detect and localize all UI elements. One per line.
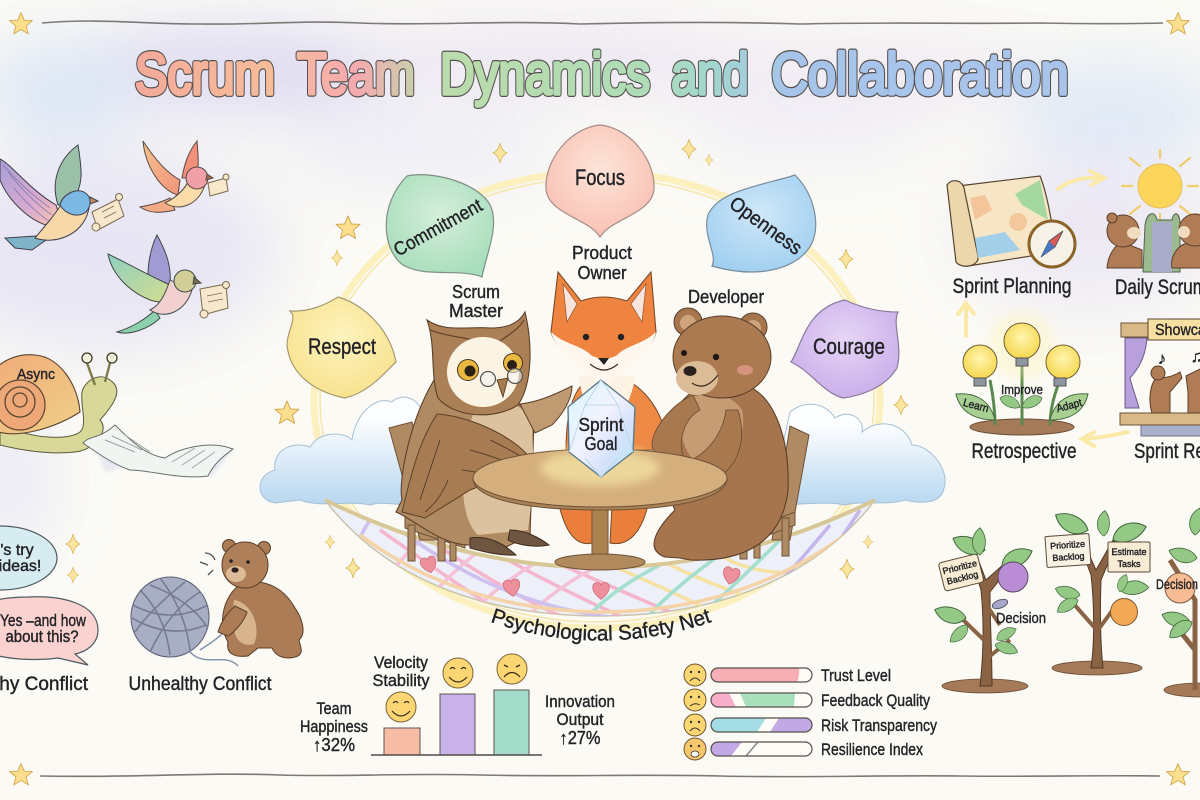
petal: Openness: Openness <box>725 193 806 260</box>
petal: Focus: Focus <box>575 165 625 190</box>
sprint goal gem: Sprint <box>578 415 624 435</box>
meter: risk transparency: Risk Transparency <box>821 717 938 735</box>
label: innovation output: ↑27% <box>560 728 600 748</box>
snail: Async <box>0 353 233 477</box>
title: Dynamics <box>440 42 650 107</box>
meter: trust level: Trust Level <box>821 667 891 685</box>
healthy conflict speech bubbles: Yes –and how <box>0 612 86 630</box>
label: innovation output <box>545 692 615 748</box>
title: Scrum <box>135 42 275 107</box>
sprint review stage <box>1120 319 1200 436</box>
title: Scrum <box>135 42 275 107</box>
label: team happiness <box>300 699 368 755</box>
sprint planning label: Sprint Planning <box>952 275 1072 298</box>
role labels: Product <box>572 243 632 263</box>
left cloud <box>260 397 430 505</box>
retrospective label: Retrospective <box>972 440 1076 463</box>
safety net label: Psychological Safety Net <box>492 608 712 644</box>
tag: prioritize backlog: Prioritize <box>1050 539 1085 551</box>
meter: resilience index: Resilience Index <box>821 741 924 759</box>
snail: Async: Async <box>17 366 55 383</box>
tag: estimate tasks: Estimate <box>1111 547 1147 557</box>
petal: Courage <box>791 300 899 398</box>
label: innovation output: Innovation <box>545 692 615 711</box>
health meters <box>684 664 938 760</box>
face: happy 2 <box>443 658 473 688</box>
title: Team <box>297 42 415 107</box>
title: and <box>672 42 748 107</box>
label: team happiness: Team <box>316 699 352 718</box>
meter: resilience index <box>684 738 924 760</box>
title: and <box>672 42 748 107</box>
unhealthy conflict label: Unhealthy Conflict <box>128 673 272 695</box>
glow under gem <box>530 438 670 502</box>
label: team happiness: Happiness <box>300 717 368 736</box>
tag: prioritize backlog: Prioritize <box>942 558 978 576</box>
yarn ball <box>131 577 238 666</box>
tree 1 <box>932 528 1046 693</box>
label: innovation output: Output <box>556 710 604 729</box>
bird 1 with scroll <box>0 145 124 250</box>
sprint goal gem: Goal <box>584 434 618 454</box>
compass <box>1029 221 1075 267</box>
healthy conflict speech bubbles <box>0 526 98 665</box>
meter: feedback quality: Feedback Quality <box>821 692 931 710</box>
decision label: Decision <box>996 610 1046 627</box>
petal: Commitment: Commitment <box>390 195 487 261</box>
sprint goal gem <box>568 380 635 477</box>
title: Team <box>297 42 415 107</box>
tag: prioritize backlog <box>1045 534 1091 567</box>
role labels <box>449 243 764 321</box>
fruit with decision label <box>1165 573 1195 603</box>
purple fruit <box>998 562 1028 592</box>
label: velocity stability: Velocity <box>374 653 428 672</box>
psychological safety net <box>325 500 875 625</box>
healthy conflict speech bubbles: 's try <box>0 542 34 559</box>
tag: prioritize backlog <box>938 554 984 591</box>
sprint planning map and compass <box>947 176 1075 267</box>
right cloud <box>770 404 945 505</box>
role labels: Scrum <box>452 282 500 302</box>
adapt leaf: Adapt <box>1055 397 1083 415</box>
petal: Commitment <box>386 175 494 277</box>
bar: velocity stability <box>440 694 475 755</box>
music notes <box>1158 347 1200 368</box>
meter: risk transparency <box>684 714 938 736</box>
arrow: retrospective to planning <box>958 303 974 336</box>
healthy conflict speech bubbles: about this? <box>6 628 78 646</box>
petal: Courage: Courage <box>813 334 885 359</box>
bottom divider <box>10 764 1189 785</box>
paper trail <box>83 425 233 477</box>
bear: Developer <box>652 308 788 560</box>
scroll <box>200 282 230 318</box>
bar: innovation output <box>494 690 529 755</box>
round table <box>473 449 727 570</box>
bar: team happiness <box>384 728 420 755</box>
arrow: review to retrospective <box>1082 432 1128 446</box>
title <box>135 42 1068 107</box>
fox: Product Owner <box>551 272 668 544</box>
tag: prioritize backlog: Backlog <box>946 569 979 587</box>
hearts on the net <box>419 555 741 599</box>
small bear <box>200 540 303 658</box>
title: Dynamics <box>440 42 650 107</box>
chairs <box>389 422 809 561</box>
stage bears <box>1150 366 1200 413</box>
sparkles around the ring <box>275 139 908 579</box>
orange fruit <box>1110 598 1138 626</box>
face: happy 1 <box>386 692 416 722</box>
petal: Openness <box>707 175 816 272</box>
small bird shape <box>991 598 1009 610</box>
title: Collaboration <box>772 42 1068 107</box>
bird 2 with scroll <box>140 141 229 212</box>
sun <box>1122 150 1198 222</box>
owl: Scrum Master <box>396 312 572 555</box>
music notes: ♪ <box>1158 349 1166 368</box>
label: team happiness: ↑32% <box>313 735 355 755</box>
tree 2 <box>1045 508 1150 675</box>
petal: Respect <box>287 297 396 398</box>
role labels: Developer <box>688 287 764 307</box>
petal: Respect: Respect <box>308 334 376 359</box>
petal: Focus <box>546 125 654 237</box>
arrow: planning to daily scrum <box>1058 171 1104 189</box>
tree 3 <box>1156 507 1200 697</box>
bar chart <box>300 653 615 755</box>
retrospective light bulbs <box>956 311 1088 435</box>
golden ring <box>314 172 880 628</box>
retrospective light bulbs: Improve <box>1001 382 1043 397</box>
top divider <box>10 13 1189 34</box>
tag: prioritize backlog: Backlog <box>1052 551 1085 563</box>
face: frowning <box>497 654 527 684</box>
label: velocity stability: Stability <box>372 671 430 690</box>
learn leaf: Learn <box>962 397 990 415</box>
meter: trust level <box>684 664 891 686</box>
scroll <box>208 174 229 196</box>
tag: estimate tasks: Tasks <box>1117 559 1141 569</box>
meter: feedback quality <box>684 689 931 711</box>
label: velocity stability <box>372 653 430 690</box>
role labels: Master <box>449 301 503 321</box>
scroll <box>92 194 124 231</box>
tag: estimate tasks <box>1108 542 1150 572</box>
bird 3 with scroll <box>108 235 230 333</box>
daily scrum bears <box>1107 213 1200 272</box>
title: Collaboration <box>772 42 1068 107</box>
role labels: Owner <box>578 263 627 283</box>
